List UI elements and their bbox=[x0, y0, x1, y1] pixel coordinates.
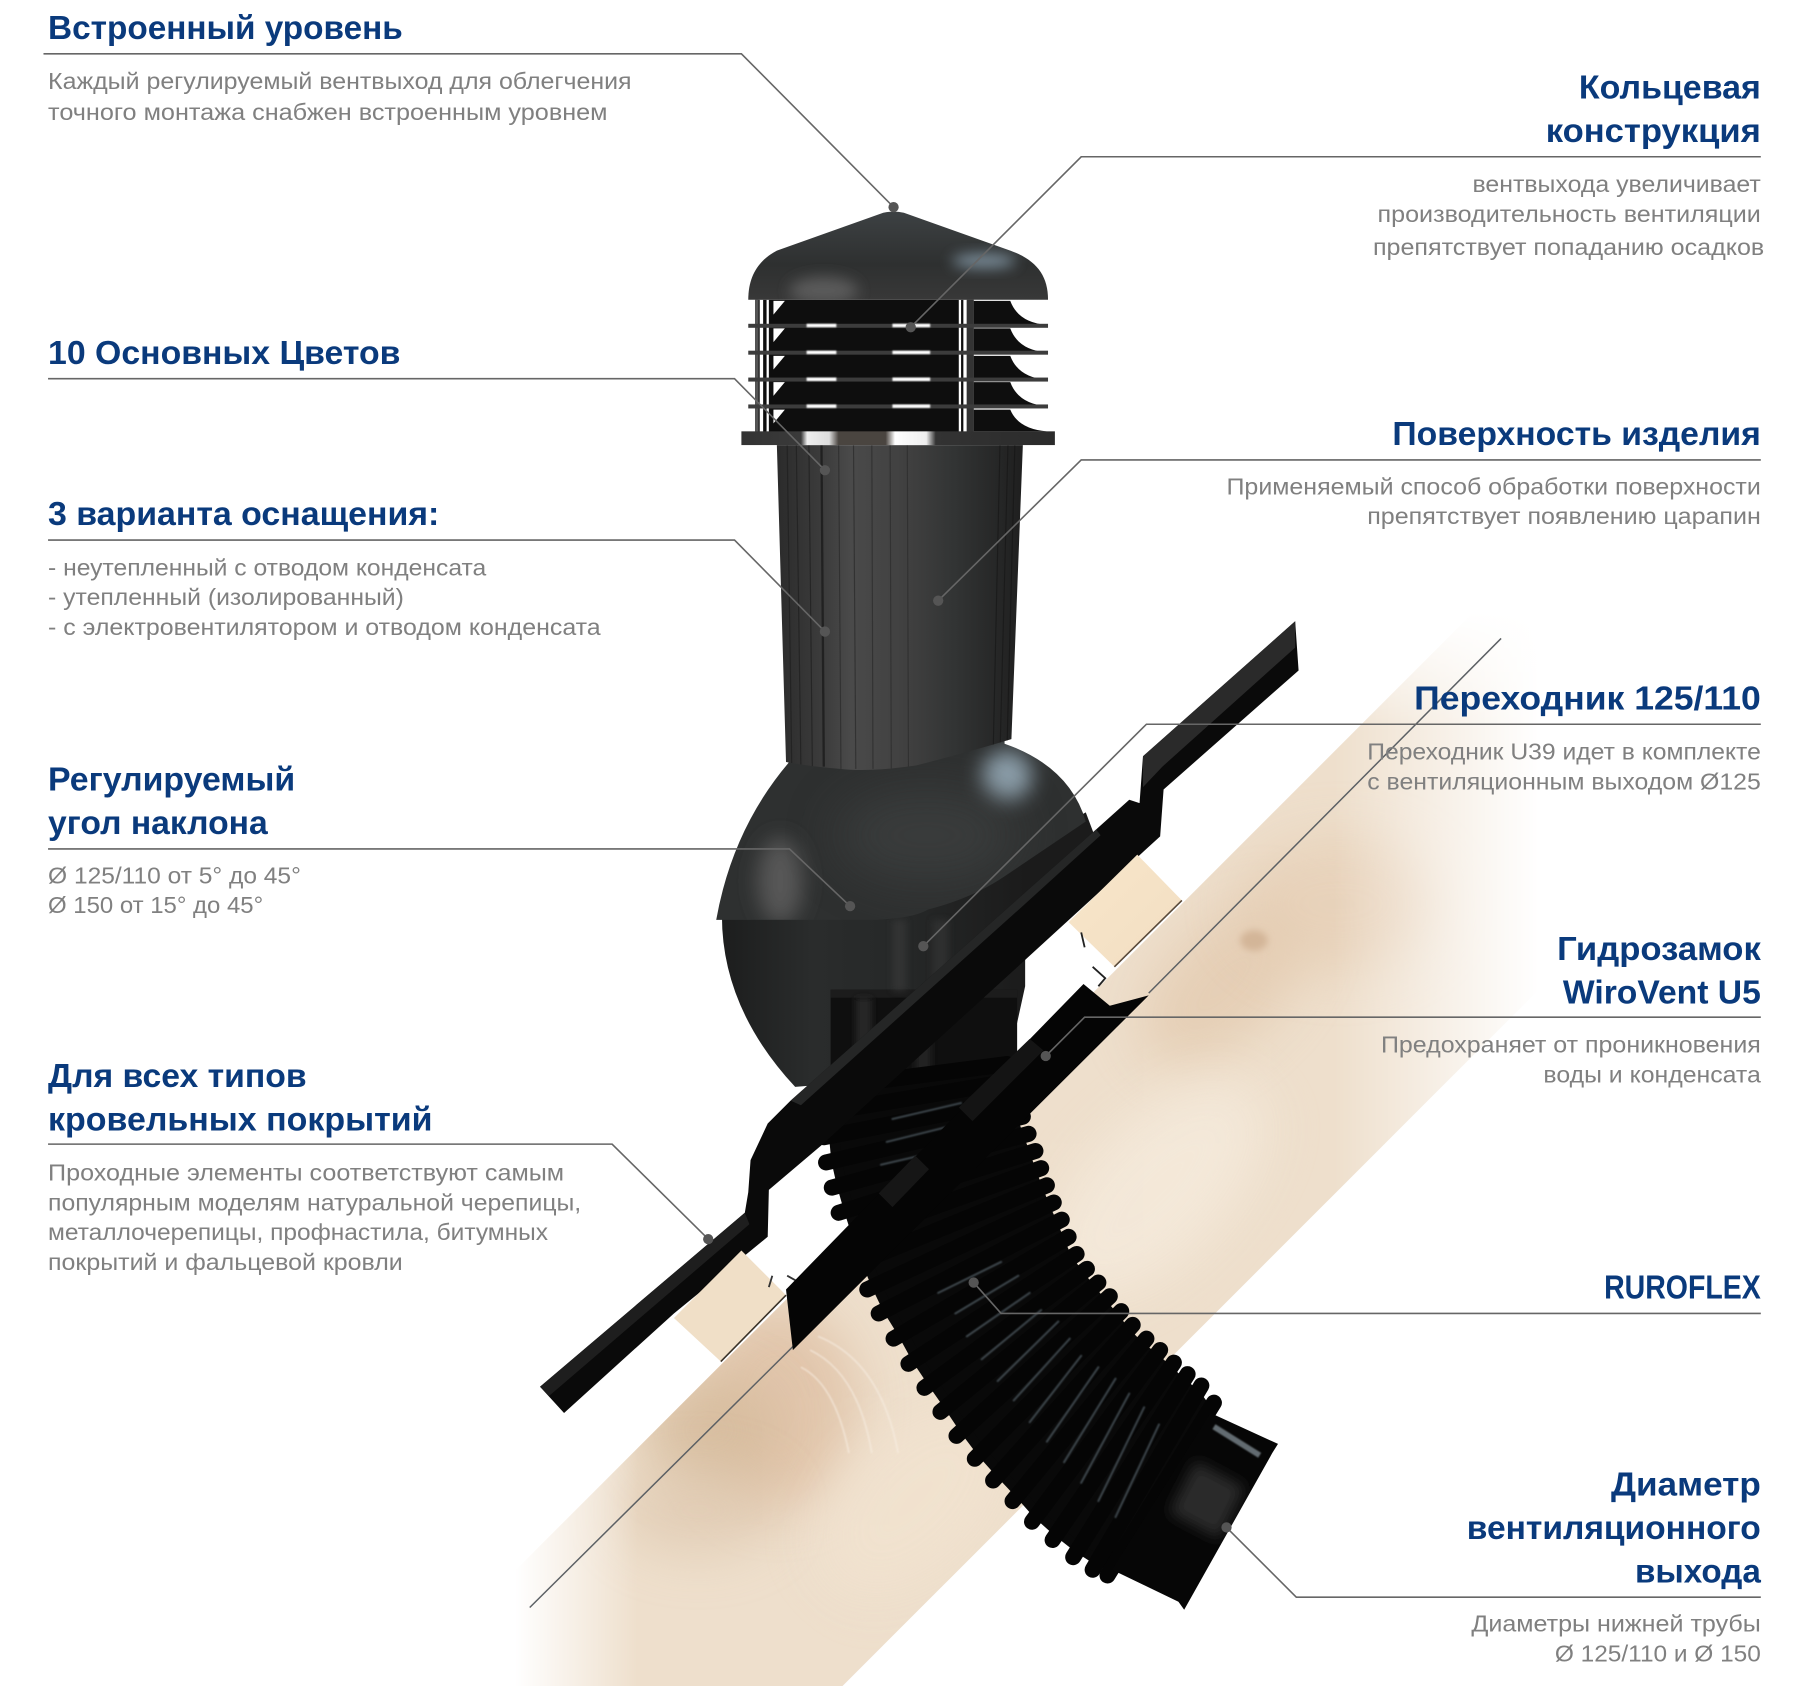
callout: all roof types: покрытий и фальцевой кровли bbox=[48, 1249, 403, 1275]
wood rafter bbox=[529, 638, 1505, 1686]
callout: all roof types bbox=[48, 1058, 713, 1275]
callout: 3 equipment options: - неутепленный с отводом конденсата bbox=[48, 555, 487, 581]
callout: ruroflex bbox=[969, 1270, 1761, 1313]
wood battens bbox=[674, 855, 1182, 1362]
callout: surface: препятствует появлению царапин bbox=[1367, 503, 1761, 529]
flange bbox=[741, 431, 1055, 445]
callout: outlet diameter: вентиляционного bbox=[1467, 1510, 1761, 1547]
callout: 10 main colours: 10 Основных Цветов bbox=[48, 335, 400, 372]
callout: adapter: Переходник 125/110 bbox=[1414, 680, 1761, 717]
callout: ring construction: препятствует попаданию осадков bbox=[1373, 234, 1764, 260]
callout: built-in level: Каждый регулируемый вентвыход для облегчения bbox=[48, 68, 632, 94]
callout: all roof types: популярным моделям натуральной черепицы, bbox=[48, 1189, 581, 1215]
neck bbox=[831, 920, 1017, 1078]
callout: hydro lock bbox=[1041, 931, 1762, 1087]
callout: outlet diameter: Диаметр bbox=[1611, 1466, 1761, 1503]
body pipe bbox=[777, 445, 1023, 770]
callout: ring construction: вентвыхода увеличивает bbox=[1472, 171, 1761, 197]
callout: adapter bbox=[918, 680, 1761, 951]
callout: adjustable angle bbox=[48, 762, 855, 918]
callout: all roof types: кровельных покрытий bbox=[48, 1101, 432, 1138]
callout: ring construction bbox=[906, 69, 1764, 332]
upper sphere shell bbox=[716, 732, 1086, 924]
hydro lock plate bbox=[786, 984, 1149, 1350]
callout: 10 main colours bbox=[48, 335, 830, 475]
callout: outlet diameter: выхода bbox=[1635, 1553, 1761, 1590]
callout: built-in level: точного монтажа снабжен встроенным уровнем bbox=[48, 99, 608, 125]
callout: all roof types: Проходные элементы соответствуют самым bbox=[48, 1160, 564, 1186]
callout: surface bbox=[933, 416, 1761, 606]
callout: hydro lock: WiroVent U5 bbox=[1563, 974, 1761, 1011]
callout: adjustable angle: угол наклона bbox=[48, 805, 268, 842]
callout: built-in level bbox=[43, 10, 899, 212]
pipe socket bbox=[1112, 1413, 1278, 1610]
callout: ring construction: производительность вентиляции bbox=[1378, 201, 1761, 227]
roof flashing bbox=[540, 621, 1299, 1413]
callout: hydro lock: Предохраняет от проникновения bbox=[1381, 1032, 1761, 1058]
lower sphere bbox=[722, 812, 1096, 1087]
callout: hydro lock: воды и конденсата bbox=[1543, 1061, 1762, 1087]
corrugated flex tube bbox=[824, 1064, 1214, 1575]
callout: 3 equipment options bbox=[48, 496, 830, 640]
callout: ruroflex: RUROFLEX bbox=[1604, 1270, 1761, 1307]
callout: surface: Применяемый способ обработки поверхности bbox=[1227, 473, 1761, 499]
callout: adjustable angle: Ø 125/110 от 5° до 45° bbox=[48, 862, 301, 888]
callout: all roof types: металлочерепицы, профнастила, битумных bbox=[48, 1219, 548, 1245]
callout: built-in level: Встроенный уровень bbox=[48, 10, 403, 47]
callout: outlet diameter: Диаметры нижней трубы bbox=[1471, 1611, 1761, 1637]
louvers bbox=[748, 300, 1048, 432]
callout: surface: Поверхность изделия bbox=[1392, 416, 1761, 453]
callout: outlet diameter bbox=[1221, 1466, 1761, 1666]
wood top edge line bbox=[530, 638, 1501, 1608]
callout: 3 equipment options: - утепленный (изолированный) bbox=[48, 584, 404, 610]
callout: adapter: с вентиляционным выходом Ø125 bbox=[1367, 768, 1761, 794]
cap bbox=[748, 212, 1048, 304]
callout: outlet diameter: Ø 125/110 и Ø 150 bbox=[1555, 1640, 1761, 1666]
callout: adapter: Переходник U39 идет в комплекте bbox=[1367, 739, 1761, 765]
callout: adjustable angle: Регулируемый bbox=[48, 762, 295, 799]
callout: all roof types: Для всех типов bbox=[48, 1058, 307, 1095]
callout: adjustable angle: Ø 150 от 15° до 45° bbox=[48, 892, 263, 918]
callout: 3 equipment options: - с электровентилятором и отводом конденсата bbox=[48, 614, 602, 640]
callout: ring construction: конструкция bbox=[1546, 113, 1761, 150]
callout: hydro lock: Гидрозамок bbox=[1557, 931, 1761, 968]
callout: ring construction: Кольцевая bbox=[1579, 69, 1761, 106]
callout: 3 equipment options: 3 варианта оснащения: bbox=[48, 496, 439, 533]
